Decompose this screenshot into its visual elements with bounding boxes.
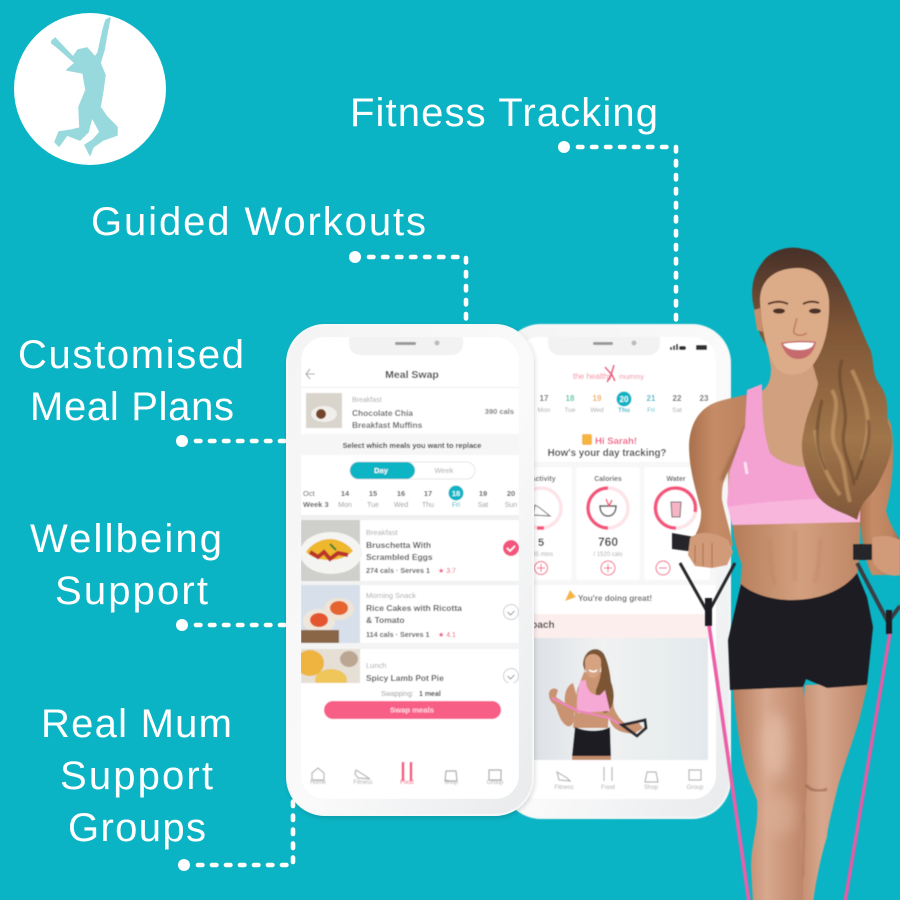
coach hair (583, 649, 614, 713)
meal card: rice cakes: Morning Snack (366, 591, 416, 600)
right leg (785, 683, 868, 900)
current meal row (306, 393, 514, 430)
long wavy hair (752, 248, 892, 520)
meal card: rice cakes (301, 585, 518, 643)
coach band (534, 614, 709, 638)
day week toggle (350, 462, 475, 479)
bottom navigation (554, 766, 704, 791)
date strip: 19 (479, 489, 487, 498)
heading: Real Mum Support Groups: Groups (68, 806, 206, 850)
heading: Wellbeing Support (30, 517, 222, 613)
phone body (503, 325, 730, 818)
card: calories: 760 (598, 535, 618, 549)
card: activity (534, 475, 562, 576)
left arm and shoulder (689, 391, 760, 562)
knee and thigh highlights (763, 713, 827, 877)
date strip: Fri (647, 407, 655, 414)
connector: Fitness Tracking (558, 141, 676, 322)
coach band: Coach (524, 620, 555, 631)
meal card: bruschetta: Breakfast (366, 528, 399, 537)
woman with resistance band (672, 248, 900, 900)
screen background (302, 338, 519, 683)
status icons (670, 344, 707, 350)
date strip: Sat (478, 502, 488, 509)
date strip: Wed (590, 407, 604, 414)
meal card: bruschetta: Scrambled Eggs (366, 552, 433, 562)
heading: Real Mum Support Groups: Support (60, 754, 213, 798)
card: calories: / 1520 cals (593, 552, 623, 558)
card: water (653, 476, 698, 576)
current meal row: Breakfast Muffins (352, 420, 423, 430)
date strip: 14 (341, 489, 350, 498)
hair strands (815, 360, 869, 502)
phone: home tracking screen (503, 325, 730, 818)
meal card: rice cakes: Rice Cakes with Ricotta (366, 603, 462, 613)
pink sports bra (727, 384, 860, 525)
nose (794, 318, 807, 335)
coach band and handle (552, 698, 622, 726)
pink resistance cords (709, 625, 890, 900)
heading: Customised Meal Plans (18, 333, 244, 429)
message: doing great: You're doing great! (578, 594, 652, 603)
bottom navigation: Home (310, 780, 327, 786)
swap action area: Swap meals (390, 706, 434, 714)
left leg (733, 685, 807, 900)
smile (781, 341, 816, 359)
meal card: rice cakes: & Tomato (366, 615, 405, 625)
meal card: bruschetta: 274 cals · Serves 1 (366, 566, 430, 575)
coach photo (515, 638, 708, 760)
shorts (728, 573, 873, 690)
greeting (548, 434, 666, 459)
current meal row: Chocolate Chia (352, 408, 413, 418)
abdominal shading (770, 530, 820, 585)
card: calories (586, 475, 630, 576)
coach arm lowered (608, 700, 644, 734)
notch (349, 337, 463, 355)
heading: Real Mum Support Groups: Real Mum (41, 702, 232, 746)
brand logo: the healthy (573, 372, 612, 381)
message: doing great (565, 590, 652, 603)
meal card: pot pie: Lunch (366, 661, 386, 670)
heading: Fitness Tracking: Fitness Tracking (350, 91, 658, 135)
date strip: Week 3 (303, 500, 329, 509)
meal card: rice cakes: ★ 4.1 (438, 631, 456, 639)
date strip: 18 (452, 489, 460, 498)
meal card: pot pie (301, 648, 519, 684)
date strip: Sun (505, 502, 517, 509)
meal card: rice cakes: 114 cals · Serves 1 (366, 630, 430, 639)
date strip: 23 (700, 394, 709, 403)
bottom navigation (310, 762, 504, 786)
meal card: bruschetta (300, 520, 519, 581)
card: water: Water (666, 476, 686, 483)
date strip: Sat (672, 407, 682, 414)
heading: Customised Meal Plans: Customised (18, 333, 244, 377)
torso (732, 515, 867, 610)
date strip: Thu (618, 407, 630, 414)
neck and chest (728, 350, 858, 505)
date strip: Fri (452, 502, 461, 509)
date strip: Mon (538, 407, 551, 414)
day week toggle: Week (434, 466, 454, 475)
notch (548, 337, 660, 355)
date strip: Tue (367, 502, 379, 509)
date strip: Mon (338, 502, 352, 509)
coach shorts (572, 727, 611, 757)
date strip: 18 (566, 394, 575, 403)
hands and handles (672, 533, 900, 576)
back arrow (306, 369, 315, 379)
date strip: 20 (507, 489, 515, 498)
greeting: Hi Sarah! (595, 436, 637, 447)
instruction strip: Select which meals you want to replace (343, 441, 481, 450)
date strip: 19 (593, 394, 602, 403)
connector: Wellbeing Support (176, 619, 288, 631)
heading: Wellbeing Support: Wellbeing (30, 517, 222, 561)
underarm shadow (722, 425, 748, 480)
brand logo (573, 365, 644, 382)
heading: Customised Meal Plans: Meal Plans (30, 385, 234, 429)
icon: jumping woman silhouette (51, 18, 117, 155)
screen title: Meal Swap (385, 369, 439, 381)
connector: Guided Workouts (349, 251, 466, 326)
swap action area: 1 meal (419, 691, 441, 698)
connector: Customised Meal Plans (176, 435, 288, 447)
eyes (773, 308, 821, 314)
meal card: bruschetta: Bruschetta With (366, 540, 431, 550)
date strip (303, 486, 517, 509)
connector: Real Mum Support Groups (178, 798, 293, 871)
swap action area (315, 682, 514, 720)
date strip: 17 (540, 394, 549, 403)
bottom navigation: Fitness (353, 780, 373, 786)
heading: Guided Workouts: Guided Workouts (91, 200, 426, 244)
eyebrows (768, 302, 819, 304)
coach torso (573, 672, 610, 728)
instruction strip (302, 435, 518, 454)
greeting: How's your day tracking? (548, 448, 666, 459)
date strip: Oct (303, 489, 316, 498)
date strip: 15 (369, 489, 377, 498)
phone: meal swap screen (287, 325, 533, 815)
date strip: 22 (673, 394, 682, 403)
brand logo: mummy (619, 374, 644, 381)
current meal row: Breakfast (352, 397, 382, 404)
date strip: 21 (647, 394, 656, 403)
screen background (528, 338, 716, 760)
meal card: pot pie: Spicy Lamb Pot Pie (366, 673, 444, 683)
card: activity: / 45 mins (529, 552, 553, 558)
card: activity: Activity (530, 476, 556, 483)
bottom navigation: Shop (444, 780, 459, 786)
day week toggle: Day (374, 466, 389, 475)
date strip: 16 (397, 489, 405, 498)
band triangles and clips (680, 563, 900, 634)
coach top (577, 680, 610, 713)
bottom navigation: Food (400, 780, 414, 786)
date strip (538, 392, 709, 414)
ear (754, 308, 763, 332)
logo: white circle with jumping woman (14, 13, 166, 165)
coach face (585, 654, 601, 678)
date strip: 20 (620, 395, 629, 404)
right arm (858, 413, 900, 575)
face (760, 268, 829, 375)
coach arm raised (549, 683, 578, 726)
meal card: bruschetta: ★ 3.7 (438, 567, 456, 575)
bottom navigation: Group (487, 780, 504, 786)
heading: Wellbeing Support: Support (55, 569, 208, 613)
phone body (287, 325, 533, 815)
date strip: 17 (424, 489, 432, 498)
bottom navigation: Food (601, 785, 615, 791)
swap action area: Swapping: (381, 691, 414, 698)
heading: Real Mum Support Groups (41, 702, 232, 850)
date strip: Thu (422, 502, 434, 509)
bottom navigation: Fitness (554, 785, 574, 791)
bottom navigation: Shop (644, 785, 659, 791)
card: activity: 5 (538, 537, 544, 549)
date strip: Wed (394, 502, 408, 509)
date strip: Tue (565, 407, 576, 414)
bottom navigation: Group (687, 785, 704, 791)
current meal row: 390 cals (485, 407, 514, 416)
card: calories: Calories (594, 476, 622, 483)
grey panel behind cards (515, 462, 716, 585)
